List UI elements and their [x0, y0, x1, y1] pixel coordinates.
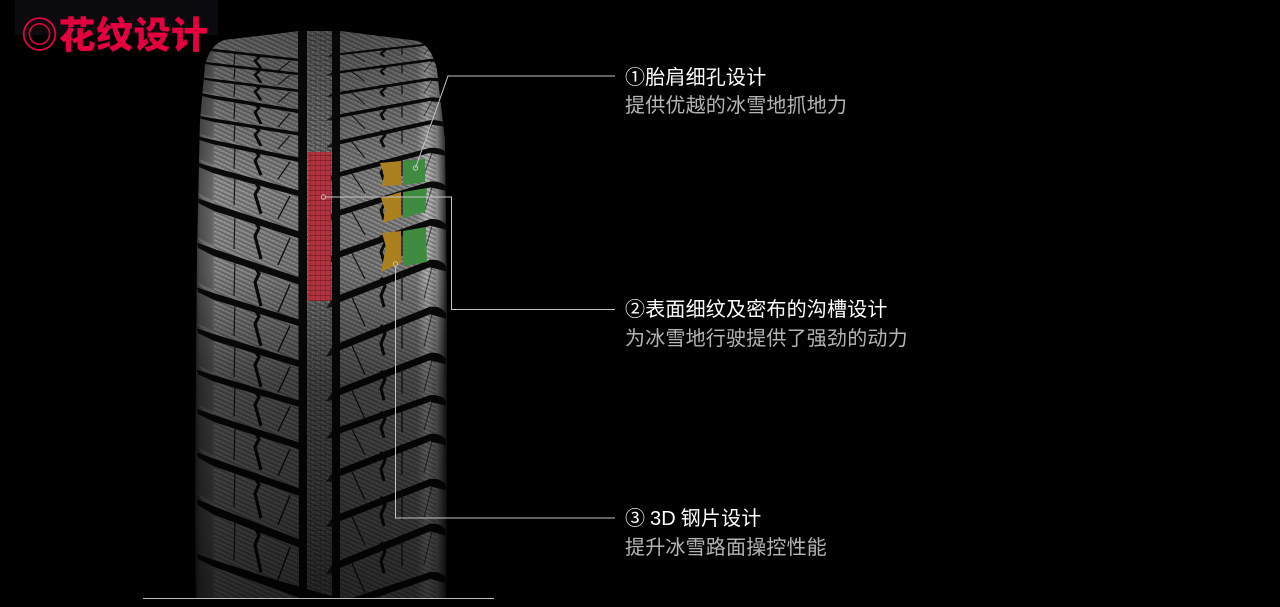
- title: ◎花纹设计: [21, 15, 208, 56]
- ground line: [143, 598, 494, 599]
- tire tread illustration: [143, 31, 615, 599]
- callout 1 heading: ①胎肩细孔设计: [625, 67, 766, 89]
- title band: [15, 0, 218, 35]
- highlighted zone: 3D sipe blocks: [380, 161, 401, 272]
- callout 2 description: 为冰雪地行驶提供了强劲的动力: [625, 328, 908, 350]
- leader line 1: [413, 76, 615, 170]
- callout 3 heading: ③ 3D 钢片设计: [625, 508, 761, 530]
- leader line 3: [393, 262, 615, 518]
- highlighted zone: shoulder sipes: [403, 159, 427, 266]
- callout 2 heading: ②表面细纹及密布的沟槽设计: [625, 299, 888, 321]
- callout 3 description: 提升冰雪路面操控性能: [625, 537, 827, 559]
- callout 1 description: 提供优越的冰雪地抓地力: [625, 95, 847, 117]
- leader line 2: [321, 195, 615, 310]
- highlighted zone: center rib: [308, 152, 331, 301]
